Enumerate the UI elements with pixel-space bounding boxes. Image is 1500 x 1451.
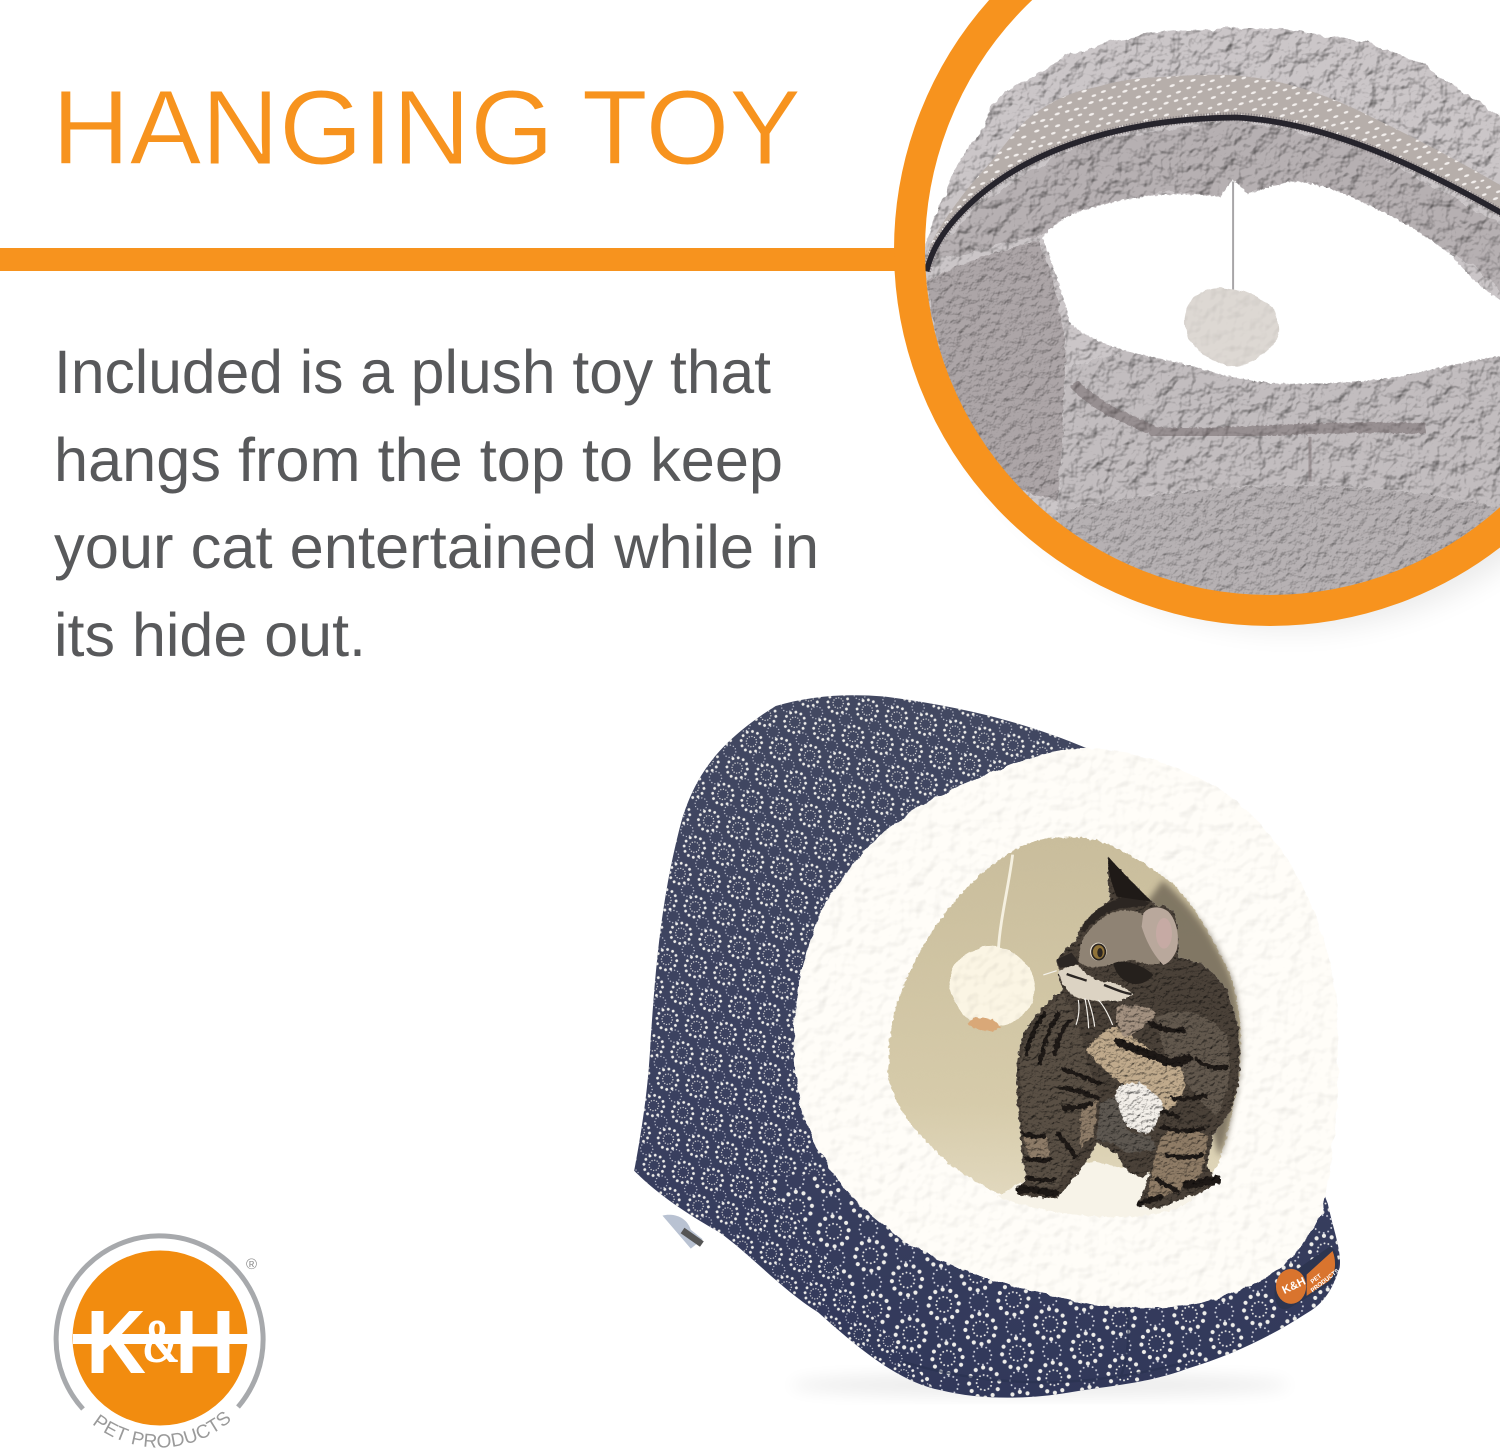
- kitten eye: [1090, 943, 1107, 961]
- toy string: [1232, 182, 1234, 290]
- panel: cat bed photo with kitten: [634, 695, 1341, 1398]
- kitten head: [1043, 857, 1178, 1028]
- sherpa floor inside: [998, 1161, 1215, 1217]
- body text block: Included is a plush toy that: [54, 338, 771, 406]
- title: HANGING TOY: [52, 69, 801, 187]
- brand patch: PET: [1309, 1272, 1323, 1285]
- K letter: K: [86, 1293, 146, 1393]
- kitten back ear: [1108, 857, 1152, 902]
- navy patterned shell: [634, 695, 1340, 1398]
- kitten muzzle: [1058, 965, 1133, 1001]
- brand patch: PRODUCTS: [1310, 1268, 1341, 1294]
- kitten front ear: [1142, 907, 1178, 965]
- cream pompom toy: [950, 946, 1035, 1031]
- kitten forehead dark: [1080, 897, 1150, 932]
- body text block: hangs from the top to keep: [54, 426, 783, 494]
- H letter: H: [175, 1293, 235, 1393]
- grey arc: [56, 1236, 263, 1409]
- body text block: [54, 338, 819, 669]
- darker inner fleece: [933, 120, 1500, 292]
- kitten cheek stripe: [1113, 962, 1153, 984]
- orange ring: [910, 0, 1500, 610]
- white crossbar: [73, 1334, 248, 1344]
- kitten neck ruff: [1116, 1005, 1157, 1037]
- white opening: [1042, 180, 1500, 384]
- grey fleece body: [925, 26, 1500, 522]
- kitten white bib: [1115, 1083, 1163, 1133]
- kitten grey flank: [1157, 1011, 1230, 1117]
- beige interior of opening: [888, 837, 1241, 1216]
- kitten nose: [1057, 953, 1079, 967]
- registered mark: ®: [246, 1256, 257, 1273]
- body text block: its hide out.: [54, 601, 366, 669]
- shadow behind kitten: [1144, 881, 1241, 1157]
- kitten right leg: [1147, 1130, 1208, 1203]
- orange disc: [72, 1250, 248, 1426]
- panel: circular close-up of hanging toy: [904, 0, 1500, 673]
- kitten belly shadow: [1097, 1097, 1157, 1153]
- kitten stripes: [1020, 1013, 1227, 1204]
- zipper line: [927, 118, 1500, 271]
- band speckles: [925, 75, 1500, 265]
- plush toy ball: [1184, 288, 1280, 367]
- kitten tan chest: [1087, 1027, 1185, 1110]
- ampersand: &: [142, 1308, 180, 1376]
- zipper teeth: [927, 117, 1500, 271]
- kitten whiskers: [1043, 971, 1113, 1028]
- white sherpa rim: [794, 748, 1338, 1309]
- kitten fur mass: [1017, 857, 1240, 1209]
- lower fleece wall: [1058, 343, 1500, 514]
- zipper band: [925, 75, 1500, 265]
- close-up photo of bed interior: [925, 26, 1500, 595]
- logo: K&H Pet Products: [54, 1233, 266, 1448]
- hanging tag: [662, 1215, 704, 1249]
- kitten ear pink: [1156, 918, 1172, 949]
- ring shadow: [924, 0, 1500, 630]
- left side panel: [927, 241, 1066, 502]
- orange divider bar: [0, 248, 896, 271]
- toy string: [998, 855, 1013, 949]
- floor pad: [1058, 484, 1500, 595]
- kitten left flank: [1020, 993, 1098, 1188]
- brand patch: [1274, 1246, 1341, 1309]
- seam shadow: [1074, 384, 1426, 433]
- kitten: [1017, 857, 1240, 1209]
- bed shadow: [790, 1373, 1290, 1397]
- brand patch: K&H: [1280, 1276, 1308, 1297]
- kitten left leg highlights: [1023, 1098, 1098, 1160]
- body text block: your cat entertained while in: [54, 513, 819, 581]
